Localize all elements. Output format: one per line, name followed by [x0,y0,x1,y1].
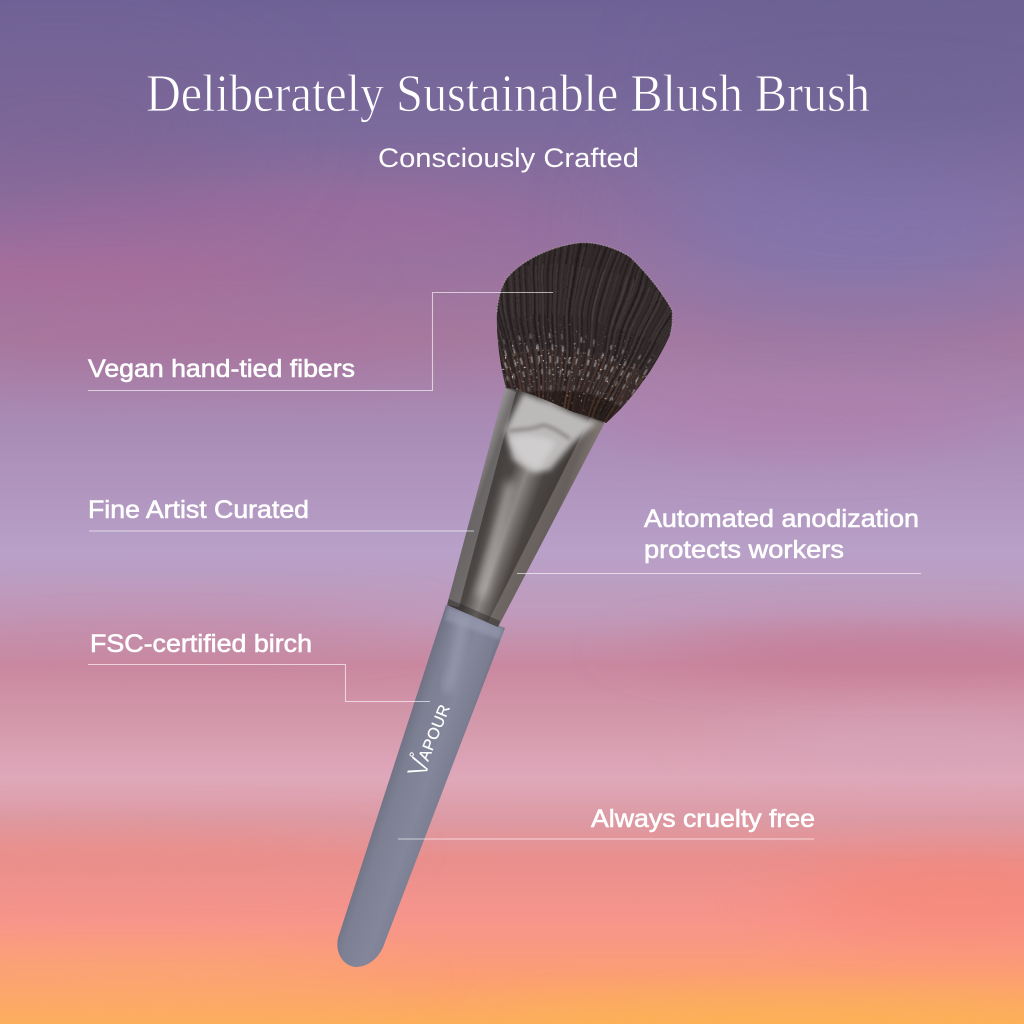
bristle rim highlight [497,243,672,335]
callout: FSC-certified birch: FSC-certified birch [90,630,312,658]
callout: Automated anodization [517,505,921,574]
callout: FSC-certified birch [88,630,430,702]
callout: Vegan hand-tied fibers: Vegan hand-tied fibers [88,355,355,383]
callout: Automated anodization: Automated anodization [644,505,919,533]
logo [401,702,454,781]
logo: V [401,753,437,781]
ferrule [447,380,604,627]
callout: Automated anodization: protects workers [644,536,844,564]
subtitle: Consciously Crafted [378,143,639,173]
bristle sparkle [502,332,652,406]
brush illustration [337,242,673,967]
handle [337,605,505,967]
callout: Always cruelty free: Always cruelty free [591,805,815,833]
callout: Vegan hand-tied fibers [88,292,553,390]
callout: Fine Artist Curated: Fine Artist Curated [88,496,309,524]
bristles [496,242,672,423]
logo: APOUR [416,702,454,763]
title: Deliberately Sustainable Blush Brush [146,65,870,123]
